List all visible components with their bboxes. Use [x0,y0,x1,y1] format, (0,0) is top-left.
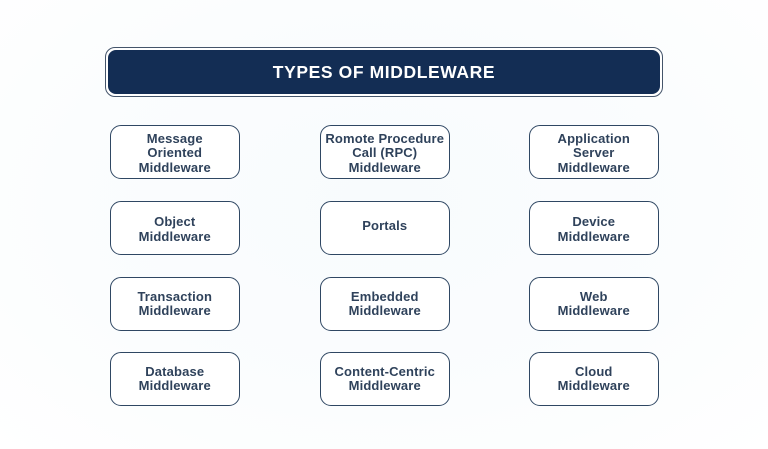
title: TYPES OF MIDDLEWARE [273,62,495,82]
box: Embedded Middleware [320,276,450,331]
box: Content-Centric Middleware: Content-Centric [335,364,435,378]
box: Message Oriented Middleware [110,124,240,179]
box: Message Oriented Middleware: Message [147,130,203,146]
box: Remote Procedure Call (RPC) Middleware: Middleware [349,160,421,174]
box: Message Oriented Middleware: Oriented [147,145,202,160]
box: Database Middleware: Database [145,364,204,378]
box: Database Middleware [110,352,240,406]
box: Application Server Middleware: Application [558,130,630,146]
box: Web Middleware: Web [580,288,608,304]
box: Message Oriented Middleware: Middleware [139,160,211,174]
box: Embedded Middleware: Embedded [351,288,419,304]
box: Remote Procedure Call (RPC) Middleware [320,124,450,179]
box: Cloud Middleware: Cloud [575,364,613,378]
box: Remote Procedure Call (RPC) Middleware: Call (RPC) [352,145,417,160]
box: Cloud Middleware [529,352,658,406]
box: Application Server Middleware: Server [573,145,614,160]
box: Remote Procedure Call (RPC) Middleware: Romote Procedure [325,130,444,146]
box: Content-Centric Middleware: Middleware [349,378,421,393]
box: Application Server Middleware: Middleware [558,160,630,174]
box: Object Middleware: Middleware [139,228,211,244]
title banner [105,47,663,97]
box: Cloud Middleware: Middleware [558,378,630,393]
title [108,50,660,94]
box: Device Middleware: Middleware [558,228,630,244]
box: Transaction Middleware: Middleware [139,303,211,318]
box: Transaction Middleware [110,276,240,331]
box: Object Middleware: Object [154,214,195,229]
box: Application Server Middleware [529,124,658,179]
box: Content-Centric Middleware [320,352,450,406]
box: Device Middleware: Device [572,214,615,229]
box: Object Middleware [110,200,240,255]
box: Web Middleware: Middleware [558,303,630,318]
box: Portals [320,200,450,255]
box: Database Middleware: Middleware [139,378,211,393]
box: Portals: Portals [362,218,407,232]
box: Embedded Middleware: Middleware [349,303,421,318]
box: Transaction Middleware: Transaction [137,288,212,304]
box: Web Middleware [529,276,658,331]
box: Device Middleware [529,200,658,255]
